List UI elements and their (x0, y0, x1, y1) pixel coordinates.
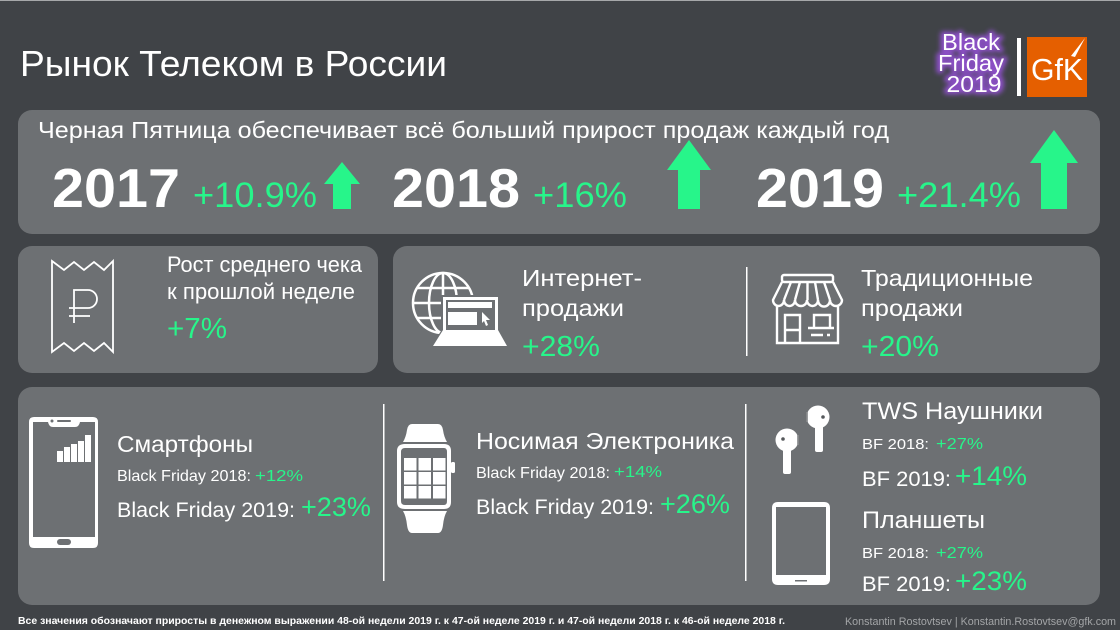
text: online sales: Интернет- (522, 265, 642, 291)
text: tablets: BF 2019: (862, 572, 951, 596)
text: wearables: Black Friday 2019: (476, 495, 654, 519)
text: tablets: Планшеты (862, 507, 985, 534)
text: wearables: +26% (660, 489, 730, 519)
text: smartphones: +23% (301, 492, 371, 522)
stat: 2019: +21.4% (897, 176, 1021, 215)
text: tablets: +27% (936, 545, 983, 562)
text: smartphones: Смартфоны (117, 431, 253, 457)
stat: 2017 (52, 157, 360, 219)
text: traditional sales: продажи (861, 295, 963, 321)
text: smartphones (117, 431, 371, 522)
stat: 2017: +10.9% (193, 176, 317, 215)
logo: Black Friday 2019: Black (942, 29, 1001, 55)
stat: 2018: 2018 (392, 157, 520, 219)
stat: 2019: 2019 (756, 157, 884, 219)
text: TWS earphones (862, 398, 1043, 491)
text: wearables: +14% (614, 464, 662, 481)
icon: store (773, 275, 842, 343)
text: TWS earphones: +27% (936, 436, 983, 453)
stat: 2017: 2017 (52, 157, 180, 219)
logo divider (1017, 38, 1021, 96)
logo: Black Friday 2019: Black (941, 29, 1002, 55)
panel: sales channels (393, 246, 1100, 373)
text: TWS earphones: BF 2019: (862, 467, 951, 491)
text: smartphones: Black Friday 2019: (117, 498, 295, 522)
icon: smartphone (29, 417, 98, 548)
author credit: Konstantin Rostovtsev | Konstantin.Rostovtsev@gfk.com (845, 616, 1116, 628)
logo: Black Friday 2019: 2019 (946, 71, 1002, 97)
logo: GfK (1027, 37, 1087, 97)
text: online sales (522, 265, 642, 363)
text: traditional sales: Традиционные (861, 265, 1033, 291)
logo: Black Friday 2019: 2019 (946, 71, 1002, 97)
subheading: Черная Пятница обеспечивает всё больший прирост продаж каждый год (38, 117, 889, 143)
logo: Black Friday 2019 (937, 29, 1006, 97)
logo: Black Friday 2019: Friday (937, 50, 1006, 76)
panel: yearly growth (18, 110, 1100, 234)
text: online sales: +28% (522, 331, 600, 363)
stat: 2019 (756, 130, 1078, 219)
footnote: Все значения обозначают приросты в денежном выражении 48-ой недели 2019 г. к 47-ой неделе 2019 г. и 47-ой недели 2018 г. к 46-ой неделе 2018 г. (18, 615, 785, 627)
text: average check: к прошлой неделе (167, 279, 355, 304)
text: average check (167, 252, 363, 345)
stat: 2018 (392, 140, 711, 219)
icon: receipt with ruble (52, 261, 113, 352)
text: wearables (476, 428, 734, 519)
text: average check: +7% (167, 313, 227, 345)
text: TWS earphones: +14% (955, 461, 1027, 491)
icon: earbuds (776, 406, 830, 474)
icon: tablet (772, 502, 830, 585)
text: tablets: +23% (955, 566, 1027, 596)
icon: smartwatch (397, 424, 455, 533)
text: wearables: Black Friday 2018: (476, 465, 610, 482)
text: smartphones: Black Friday 2018: (117, 468, 251, 485)
text: average check: Рост среднего чека (167, 252, 363, 277)
title: Рынок Телеком в России (20, 43, 447, 84)
text: tablets (862, 507, 1027, 596)
text: online sales: продажи (522, 295, 624, 321)
text: TWS earphones: BF 2018: (862, 436, 929, 453)
text: smartphones: +12% (255, 468, 303, 485)
text: tablets: BF 2018: (862, 545, 929, 562)
text: traditional sales: +20% (861, 331, 939, 363)
text: wearables: Носимая Электроника (476, 428, 734, 454)
stat: 2018: +16% (533, 176, 627, 215)
panel: categories (18, 387, 1100, 605)
icon: globe and laptop (413, 273, 510, 348)
text: TWS earphones: TWS Наушники (862, 398, 1043, 425)
logo: Black Friday 2019: Friday (938, 50, 1005, 76)
panel: average check (18, 246, 378, 373)
logo: GfK: GfK (1031, 52, 1083, 87)
text: traditional sales (861, 265, 1033, 363)
